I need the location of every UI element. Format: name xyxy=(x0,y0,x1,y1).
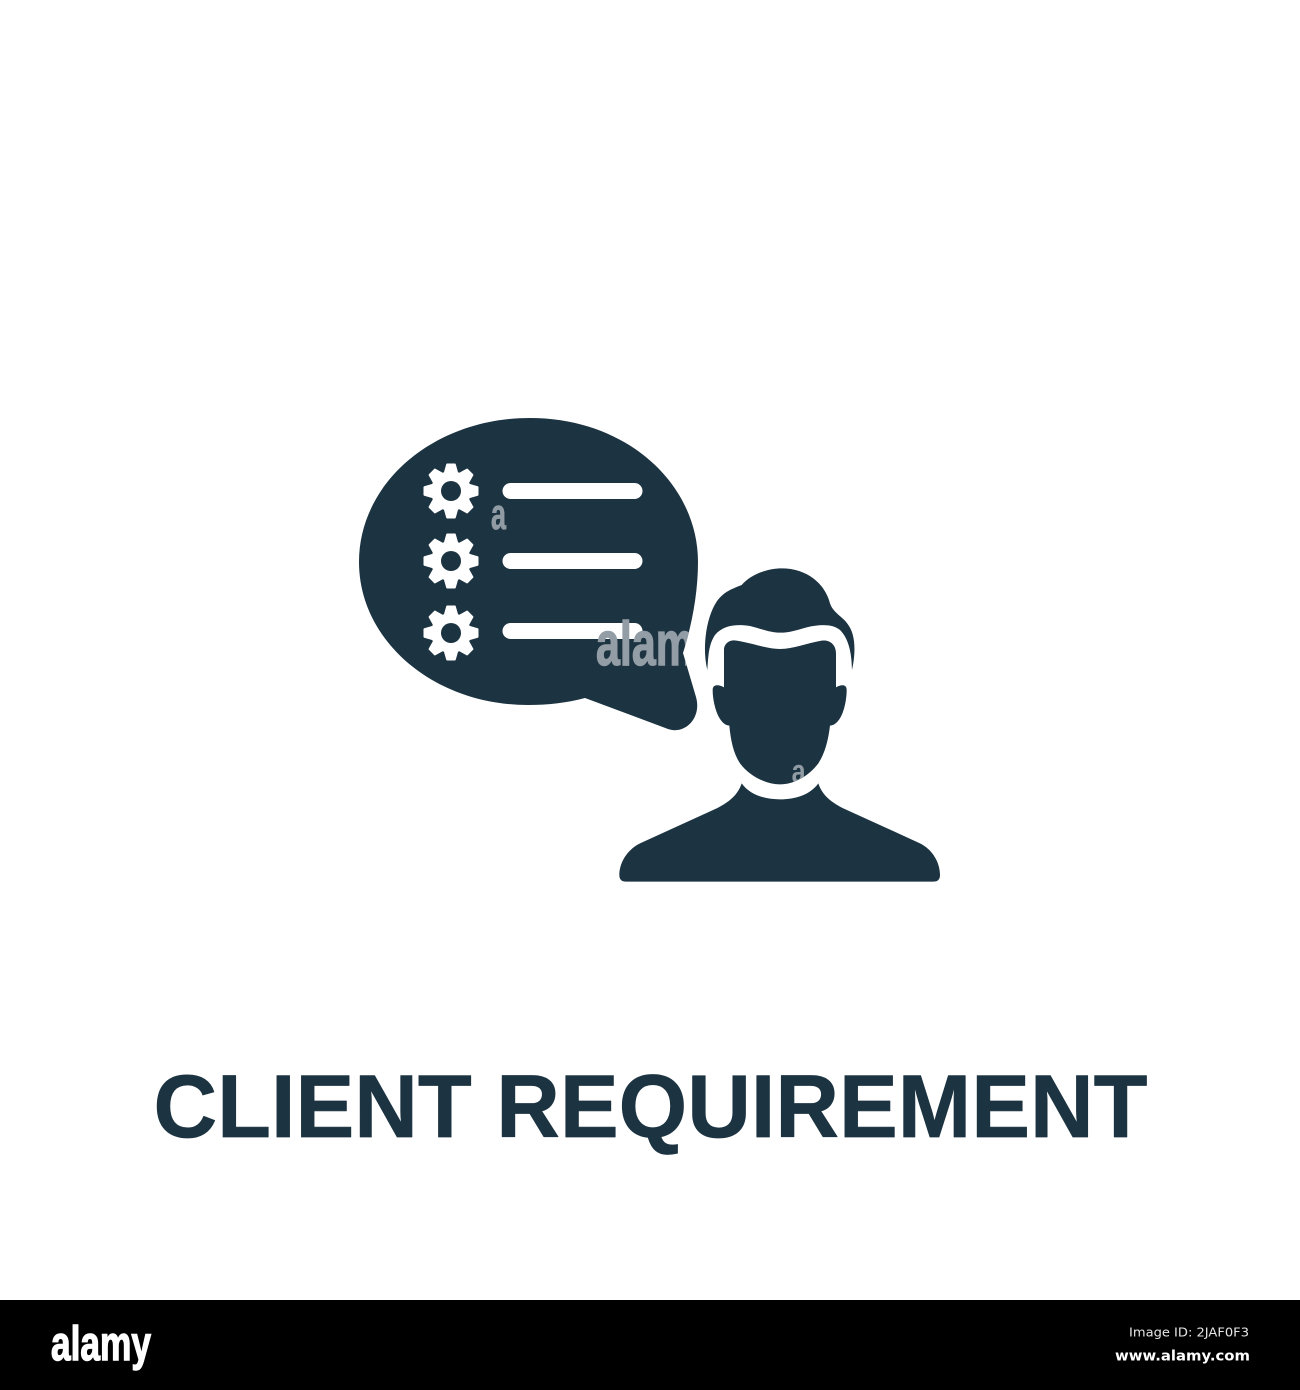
infographic canvas xyxy=(0,418,1300,1390)
icon: gear 3 xyxy=(424,606,478,660)
watermark fragment: alam: alamy xyxy=(596,610,718,679)
list line 1 xyxy=(502,483,642,499)
footer logo: alamy xyxy=(51,1318,151,1371)
title: CLIENT REQUIREMENT xyxy=(154,1056,1148,1156)
icon: gear 2 xyxy=(424,534,478,588)
icon: speech bubble with requirements list xyxy=(359,418,718,730)
image id: Image ID: 2JAF0F3 xyxy=(1129,1324,1249,1340)
footer band xyxy=(0,1300,1300,1390)
watermark fragment: a: a xyxy=(491,490,506,539)
watermark fragment on chin: a xyxy=(792,753,806,790)
website: www.alamy.com xyxy=(1115,1348,1250,1364)
list line 3 xyxy=(502,623,642,639)
icon: gear 1 xyxy=(424,464,478,518)
icon: client person xyxy=(619,568,940,882)
speech bubble shape xyxy=(359,418,698,730)
face xyxy=(713,640,847,784)
list line 2 xyxy=(502,553,642,569)
hair xyxy=(705,568,854,670)
shoulders xyxy=(619,783,940,882)
